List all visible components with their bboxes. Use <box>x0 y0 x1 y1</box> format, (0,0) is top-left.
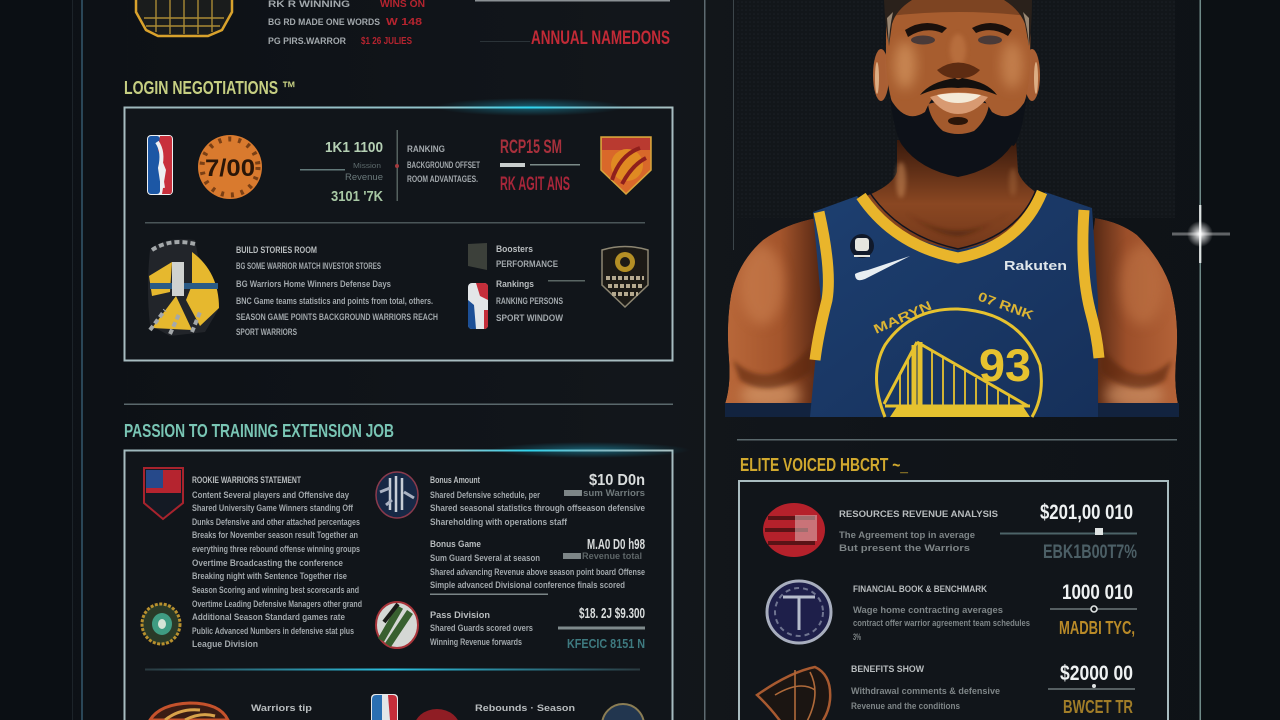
left arm <box>725 218 825 412</box>
text: row one description: But present the Warriors <box>839 543 970 554</box>
text: left description column: Breaking night with Sentence Together rise <box>192 571 347 582</box>
icon: orange round badge <box>198 135 262 199</box>
right arm <box>1094 218 1178 403</box>
text: rank notes: RANKING <box>407 144 445 155</box>
portrait: player: 07 RNK <box>976 289 1036 323</box>
text: lower right label: Rebounds · Season <box>475 703 575 714</box>
eyes and brows <box>905 23 1012 44</box>
icon: small grey tile <box>468 243 487 270</box>
text: stat block three: $18. 2J $9.300 <box>579 605 645 622</box>
nose <box>937 62 980 78</box>
stat: row two value: 1000 010 <box>1062 581 1133 604</box>
text: stat block three: Pass Division <box>430 610 490 621</box>
panel: section one <box>124 98 673 360</box>
text: section one side notes: RANKING PERSONS <box>496 296 563 307</box>
text: stat block two: Shared advancing Revenue above season point board Offense <box>430 567 645 578</box>
text: section one description <box>236 245 438 338</box>
text: rank notes: BACKGROUND OFFSET <box>407 160 480 171</box>
text: stat block two: Simple advanced Divisional conference finals scored <box>430 580 625 591</box>
text: section one description: SEASON GAME POINTS BACKGROUND WARRIORS REACH <box>236 312 438 323</box>
text: left description column: Overtime Broadcasting the conference <box>192 558 343 569</box>
text: stat block one: Bonus Amount <box>430 475 481 486</box>
text: row two description: Wage home contracting averages <box>853 605 1003 616</box>
text: left description column: Overtime Leading Defensive Managers other grand <box>192 599 362 610</box>
icon: dark gold crest <box>602 246 648 307</box>
stat: red values <box>500 137 580 195</box>
text: row one description: The Agreement top in average <box>839 530 975 541</box>
wristbands <box>725 403 1179 417</box>
heading: section three: ELITE VOICED HBCRT ~_ <box>740 455 909 475</box>
text: top stats list: PG PIRS.WARROR <box>268 36 346 47</box>
row: red emblem item <box>763 501 1137 563</box>
text: stat block three <box>430 605 645 651</box>
text: left description column: Additional Season Standard games rate <box>192 612 345 623</box>
jersey body <box>810 192 1098 417</box>
text: stat block two <box>430 536 645 595</box>
text: section one description: BNC Game teams statistics and points from total, others. <box>236 296 433 307</box>
heading: section one: LOGIN NEGOTIATIONS ™ <box>124 78 296 98</box>
text: section one description: SPORT WARRIORS <box>236 327 297 338</box>
text: stat block one: Shared Defensive schedule, per <box>430 490 540 501</box>
neck and chest <box>855 140 1050 268</box>
jersey patch <box>850 234 874 258</box>
panel: portrait background <box>733 0 1175 250</box>
text: section one side notes: Boosters <box>496 244 533 255</box>
chin skin <box>928 100 989 134</box>
text: stat block one: sum Warriors <box>583 488 645 499</box>
text: rank notes: ROOM ADVANTAGES. <box>407 174 478 185</box>
text: section one description: BG Warriors Home Winners Defense Days <box>236 279 391 290</box>
stat: row two value <box>1050 581 1137 638</box>
text: stat block one: $10 D0n <box>589 472 645 489</box>
jersey arc text: MARYN <box>871 298 934 337</box>
text: row three description: BENEFITS SHOW <box>851 664 924 675</box>
text: left description column <box>192 475 362 650</box>
jersey logo bridge <box>876 309 1041 417</box>
icon: gold championship badge <box>136 0 232 36</box>
text: rank notes <box>407 144 480 185</box>
text: row one description: RESOURCES REVENUE ANALYSIS <box>839 509 998 520</box>
text: left description column: Public Advanced Numbers in defensive stat plus <box>192 626 354 637</box>
jersey sponsor text: Rakuten <box>1004 258 1067 273</box>
icon: navy round emblem <box>767 581 831 643</box>
text: stat block two: M.A0 D0 h98 <box>587 536 645 553</box>
text: stat block two: Revenue total <box>582 551 642 562</box>
icon: green gold medallion <box>142 604 180 644</box>
icon: swoosh <box>855 256 910 280</box>
hair fade <box>884 0 1032 46</box>
text: top stats list: W 148 <box>386 17 423 28</box>
text: row three description: Withdrawal comments & defensive <box>851 686 1000 697</box>
mouth and teeth <box>930 92 988 125</box>
text: section one side notes: SPORT WINDOW <box>496 313 563 324</box>
text: red award title: ANNUAL NAMEDONS <box>531 28 670 49</box>
panel: section three <box>739 481 1168 720</box>
stat: row three value <box>1048 662 1135 717</box>
icon: league logo <box>147 135 173 195</box>
icon: league logo lower <box>371 694 398 720</box>
text: left description column: League Division <box>192 639 258 650</box>
icon: red round crest <box>414 709 460 720</box>
stat: row one value: EBK1B00T7% <box>1043 542 1137 563</box>
icon: copper heart emblem <box>757 667 830 720</box>
text: left description column: Content Several players and Offensive day <box>192 490 350 501</box>
stat: left values: Revenue <box>345 172 383 182</box>
text: row two description <box>853 584 1030 643</box>
icon: orange round badge: 7/00 <box>205 155 255 182</box>
text: section one description: BUILD STORIES ROOM <box>236 245 317 256</box>
stat: row one value: $201,00 010 <box>1040 501 1133 524</box>
text: stat block three: KFECIC 8151 N <box>567 636 645 651</box>
icon: ornate orange crest <box>150 703 228 720</box>
text: section one side notes <box>496 244 585 324</box>
text: stat block one: Shareholding with operations staff <box>430 517 568 528</box>
stat: red values: RK AGIT ANS <box>500 174 570 195</box>
text: left description column: Breaks for November season result Together an <box>192 530 358 541</box>
stat: red values: RCP15 SM <box>500 137 562 158</box>
text: section one description: BG SOME WARRIOR MATCH INVESTOR STORES <box>236 261 381 272</box>
row: navy emblem item <box>767 581 1137 643</box>
text: row one description <box>839 509 998 554</box>
icon: red shield <box>144 468 183 519</box>
text: top stats list <box>268 0 425 47</box>
jersey number: 93 <box>979 340 1031 391</box>
stat: left values: Mission <box>353 163 381 170</box>
stat: row three value: $2000 00 <box>1060 662 1133 685</box>
text: left description column: everything three rebound offense winning groups <box>192 544 360 555</box>
stat: row one value <box>1000 501 1137 563</box>
text: top stats list: BG RD MADE ONE WORDS <box>268 17 380 28</box>
text: row two description: 3% <box>853 632 861 643</box>
text: stat block three: Winning Revenue forwards <box>430 637 522 648</box>
stat: row three value: BWCET TR <box>1063 697 1133 717</box>
icon: yellow player badge <box>148 239 219 336</box>
icon: navy round crest <box>602 704 644 720</box>
text: left description column: ROOKIE WARRIORS STATEMENT <box>192 475 301 486</box>
stat: left values: 1K1 1100 <box>325 139 383 156</box>
text: top stats list: $1 26 JULIES <box>361 36 412 47</box>
text: stat block two: Bonus Game <box>430 539 481 550</box>
text: stat block one: Shared seasonal statistics through offseason defensive <box>430 503 645 514</box>
text: stat block three: Shared Guards scored overs <box>430 623 533 634</box>
text: lower left label: Warriors tip <box>251 703 312 714</box>
text: section one side notes: PERFORMANCE <box>496 259 558 270</box>
heading: section two: PASSION TO TRAINING EXTENSION JOB <box>124 421 394 441</box>
text: left description column: Dunks Defensive and other attached percentages <box>192 517 360 528</box>
beard <box>890 96 1027 177</box>
text: left description column: Shared University Game Winners standing Off <box>192 503 354 514</box>
text: left description column: Season Scoring and winning best scorecards and <box>192 585 359 596</box>
ears <box>873 49 1040 101</box>
text: stat block two: Sum Guard Several at season <box>430 553 540 564</box>
text: row two description: FINANCIAL BOOK & BENCHMARK <box>853 584 987 595</box>
mustache <box>920 78 997 95</box>
text: section one side notes: Rankings <box>496 279 534 290</box>
icon: orange shield <box>601 137 651 194</box>
text: row three description: Revenue and the conditions <box>851 701 960 712</box>
icon: league logo small <box>468 283 488 329</box>
stat: left values: 3101 '7K <box>331 188 383 205</box>
text: row two description: contract offer warrior agreement team schedules <box>853 618 1030 629</box>
star flare on right rule <box>1172 205 1230 263</box>
icon: striped red round emblem <box>376 602 418 648</box>
row: copper emblem item <box>757 662 1135 720</box>
icon: red round emblem <box>763 503 825 557</box>
panel: section two <box>124 442 690 720</box>
text: row three description <box>851 664 1000 712</box>
stat: left values <box>300 139 383 205</box>
icon: navy round emblem <box>376 472 418 518</box>
portrait: player <box>725 0 1179 417</box>
head <box>886 0 1031 150</box>
top section fragment <box>136 0 670 49</box>
text: stat block one <box>430 472 645 528</box>
jersey trim <box>815 190 1099 360</box>
stat: row two value: MADBI TYC, <box>1059 618 1135 638</box>
